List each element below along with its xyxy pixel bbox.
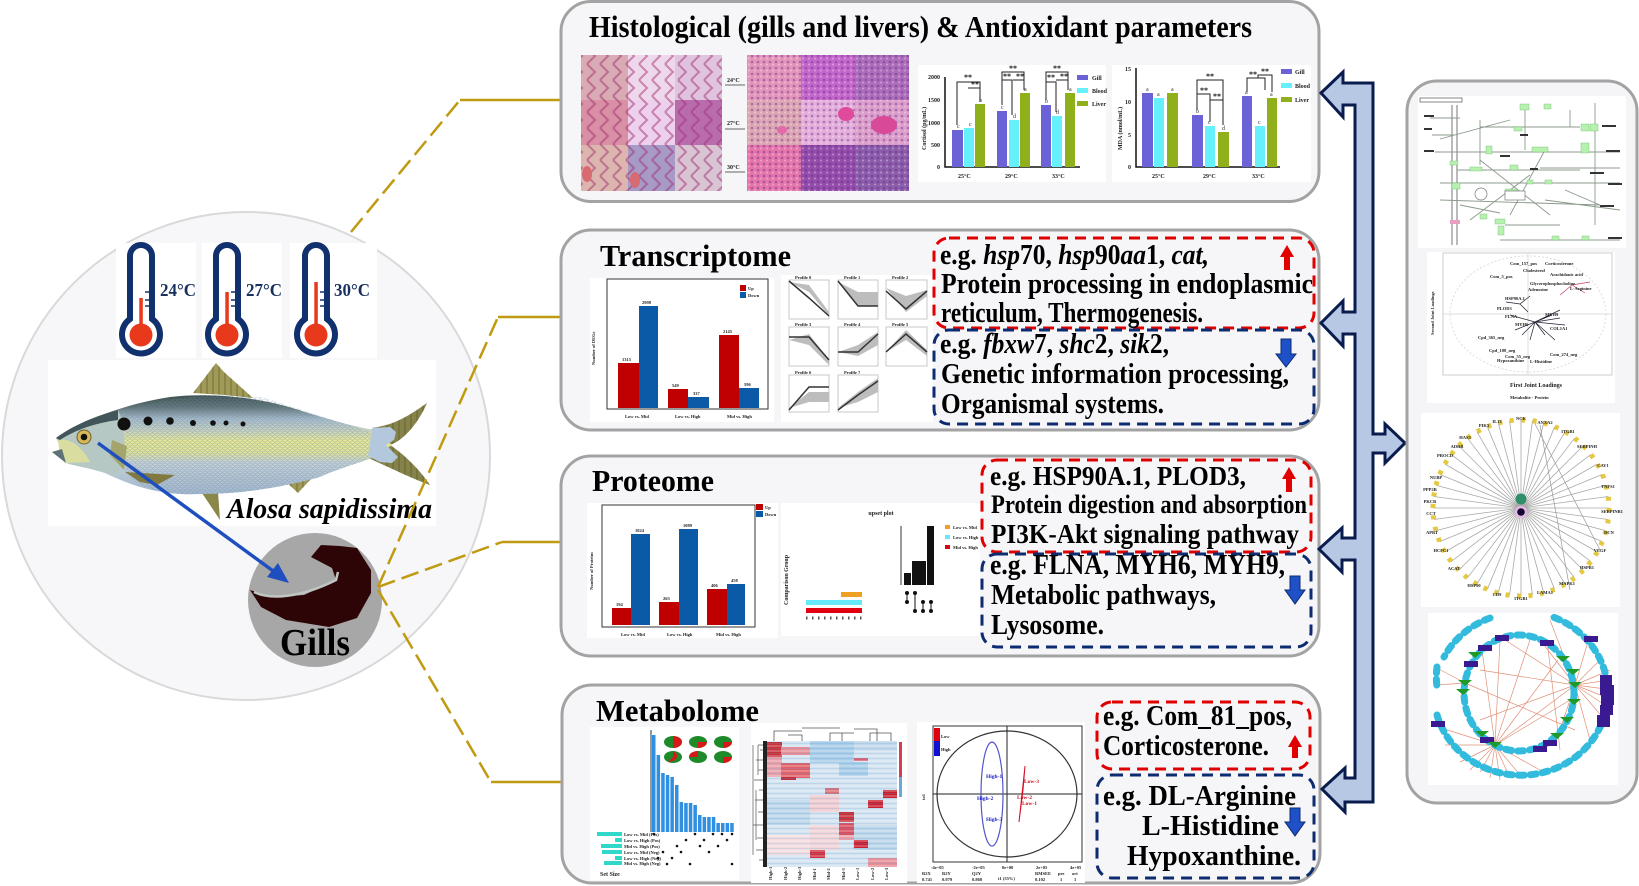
panel box xyxy=(561,2,1319,202)
upregulated callout: PI3K-Akt signaling pathway xyxy=(991,519,1299,549)
loadings plot: Metabolite · Protein xyxy=(1510,395,1549,400)
temperature labels between tiles xyxy=(725,77,745,172)
protein interaction network: HAS3 xyxy=(1459,435,1471,440)
protein interaction network: DCN xyxy=(1604,530,1615,535)
cortisol bar chart: ** xyxy=(1009,64,1017,73)
OPLS-DA score plot: R2Y xyxy=(942,871,951,876)
protein interaction network: ACAT xyxy=(1448,566,1460,571)
MDA bar chart: a xyxy=(1171,87,1174,93)
OPLS-DA score plot: RMSEE xyxy=(1035,871,1051,876)
MDA bar chart: 0 xyxy=(1128,165,1131,171)
DEG bar chart: 2145 xyxy=(723,329,733,334)
loadings plot: FLNA xyxy=(1505,314,1518,319)
cortisol bar chart: b xyxy=(1045,99,1048,105)
loadings plot: Cholesterol xyxy=(1523,268,1546,273)
protein interaction network: IL13 xyxy=(1492,419,1502,424)
cortisol bar chart: 1500 xyxy=(928,98,940,104)
liver histology tiles xyxy=(747,55,909,191)
cortisol bar chart: 29°C xyxy=(1005,173,1018,180)
upregulated callout: Corticosterone. xyxy=(1103,731,1269,762)
MDA bar chart: 15 xyxy=(1125,67,1131,73)
heatmap: Low-2 xyxy=(870,867,875,880)
panel box xyxy=(562,685,1320,883)
DEG bar chart: Number of DEGs xyxy=(591,331,596,365)
thermometers xyxy=(116,243,377,358)
up arrow xyxy=(1288,735,1302,758)
MDA bar chart: c xyxy=(1208,120,1211,126)
DEG bar chart: 1315 xyxy=(622,357,632,362)
cortisol bar chart: a xyxy=(1024,87,1027,93)
trend profile plots: Profile 6 xyxy=(795,370,812,375)
panel: integrated analysis xyxy=(1407,81,1637,803)
OPLS-DA score plot: 0e+00 xyxy=(1002,865,1014,870)
cortisol bar chart: ** xyxy=(964,73,972,82)
trend profile plots: Profile 0 xyxy=(795,275,812,280)
loadings plot: COL1A1 xyxy=(1550,326,1568,331)
DEP bar chart: 263 xyxy=(663,596,670,601)
cortisol bar chart: ** xyxy=(1060,72,1068,81)
cortisol bar chart: ** xyxy=(1016,72,1024,81)
upregulated callout xyxy=(1097,701,1310,769)
upregulated callout xyxy=(982,460,1311,552)
metabolite protein network xyxy=(1428,613,1618,785)
trend profile plots: Profile 1 xyxy=(844,275,861,280)
cortisol bar chart: ** xyxy=(1003,72,1011,81)
arrow: integration double arrows xyxy=(1319,72,1405,812)
cortisol bar chart: b xyxy=(979,98,982,104)
downregulated callout: e.g. DL-Arginine xyxy=(1103,781,1296,812)
MDA bar chart: 33°C xyxy=(1252,173,1265,180)
MDA bar chart: ** xyxy=(1206,72,1214,81)
OPLS-DA score plot: -4e+05 xyxy=(931,865,945,870)
OPLS-DA score plot: 4e+05 xyxy=(1070,865,1082,870)
DEP bar chart: Number of Proteins xyxy=(589,552,594,590)
DEP bar chart: Low vs. High xyxy=(667,632,693,637)
panel: fish and temperature circle xyxy=(2,212,490,700)
DEG bar chart: 549 xyxy=(672,383,680,388)
DEP bar chart: 194 xyxy=(616,602,624,607)
trend profile plots: Profile 4 xyxy=(844,322,861,327)
loadings plot: HSP90A.1 xyxy=(1505,296,1526,301)
OPLS-DA score plot xyxy=(917,722,1085,883)
MDA bar chart: a xyxy=(1157,92,1160,98)
heading: Proteome xyxy=(592,463,714,498)
protein interaction network: PKCR xyxy=(1424,499,1437,504)
cortisol bar chart: c xyxy=(969,122,972,128)
trend profile plots: Profile 5 xyxy=(892,322,909,327)
fish spots xyxy=(118,416,246,430)
MDA bar chart: Liver xyxy=(1295,98,1309,104)
trend profile plots: Profile 7 xyxy=(844,370,861,375)
protein interaction network: ADRB xyxy=(1451,444,1463,449)
protein interaction network: SERPINH xyxy=(1577,444,1597,449)
OPLS-DA score plot: 1 xyxy=(1074,877,1077,882)
DEP bar chart: Up xyxy=(765,505,771,510)
protein interaction network: VEGF xyxy=(1594,548,1606,553)
loadings plot: First Joint Loadings xyxy=(1510,383,1563,389)
OPLS-DA score plot: Q2Y xyxy=(972,871,982,876)
loadings plot: Cpd_188_neg xyxy=(1489,348,1516,353)
panel box xyxy=(1407,81,1637,803)
gills image xyxy=(248,533,382,667)
heading: Metabolome xyxy=(596,693,759,728)
protein interaction network xyxy=(1421,413,1624,607)
down arrow xyxy=(1276,339,1296,367)
cortisol bar chart: d xyxy=(1013,114,1016,120)
DEP bar chart: Mid vs. High xyxy=(716,632,741,637)
panel: metabolome xyxy=(562,685,1320,883)
cortisol bar chart: Liver xyxy=(1092,102,1106,108)
metabolite upset plot: Set Size xyxy=(600,872,620,878)
protein interaction network: ITGB1 xyxy=(1514,596,1528,601)
connector: metabolome xyxy=(378,590,562,782)
cortisol bar chart: c xyxy=(957,124,960,130)
metabolite upset plot xyxy=(590,727,739,880)
protein interaction network: SERPINB1 xyxy=(1601,509,1624,514)
MDA bar chart: MDA (nmol/mL) xyxy=(1117,107,1124,150)
protein interaction network: PPP2R xyxy=(1423,487,1438,492)
upset plot: Mid vs. High xyxy=(953,545,978,550)
MDA bar chart: a xyxy=(1146,87,1149,93)
cortisol bar chart: Cortisol (pg/mL) xyxy=(921,107,928,150)
panel: transcriptome xyxy=(561,230,1319,430)
MDA bar chart: b xyxy=(1196,109,1199,115)
downregulated callout: e.g. FLNA, MYH6, MYH9, xyxy=(990,550,1285,581)
upset plot: upset plot xyxy=(868,511,894,517)
cortisol bar chart: ** xyxy=(1053,64,1061,73)
temperature labels between tiles: 30°C xyxy=(727,164,740,171)
OPLS-DA score plot: ort xyxy=(1072,871,1078,876)
MDA bar chart: Blood xyxy=(1295,84,1311,90)
loadings plot: Glycerophosphocholine xyxy=(1530,281,1575,286)
upregulated callout: reticulum, Thermogenesis. xyxy=(941,298,1203,329)
species name: Alosa sapidissima xyxy=(225,494,432,525)
metabolite upset plot: Low vs. Mid (Neg) xyxy=(624,850,660,855)
heatmap: Mid-1 xyxy=(812,868,817,880)
thermometer 30C xyxy=(297,245,370,353)
OPLS-DA score plot: pre xyxy=(1058,871,1064,876)
downregulated callout: Organismal systems. xyxy=(941,389,1164,420)
up arrow xyxy=(1282,467,1296,492)
upregulated callout: Protein processing in endoplasmic xyxy=(941,269,1313,300)
DEP bar chart: Down xyxy=(765,512,777,517)
trend profile plots: Profile 3 xyxy=(795,322,812,327)
DEG bar chart: Down xyxy=(748,293,760,298)
upregulated callout xyxy=(934,238,1314,329)
MDA bar chart: 29°C xyxy=(1203,173,1216,180)
KEGG pathway map xyxy=(1418,96,1626,248)
loadings plot: MYH9 xyxy=(1545,312,1559,317)
OPLS-DA score plot: High-3 xyxy=(986,817,1002,823)
protein interaction network: HCFC1 xyxy=(1434,548,1449,553)
MDA bar chart: 10 xyxy=(1125,100,1131,106)
OPLS-DA score plot: 0.102 xyxy=(1035,877,1046,882)
downregulated callout: Hypoxanthine. xyxy=(1127,841,1301,872)
OPLS-DA score plot: to1 xyxy=(921,793,926,800)
OPLS-DA score plot: -2e+05 xyxy=(972,865,986,870)
OPLS-DA score plot: High xyxy=(941,747,951,752)
heatmap: Low-1 xyxy=(855,867,860,880)
MDA bar chart: Gill xyxy=(1295,70,1305,76)
cortisol bar chart: d xyxy=(1056,110,1059,116)
metabolite upset plot: Low vs. Mid (Pos) xyxy=(624,832,659,837)
heatmap: Mid-3 xyxy=(841,868,846,880)
OPLS-DA score plot: Low-1 xyxy=(1022,801,1037,807)
DEP bar chart xyxy=(587,503,778,638)
loadings plot: Com_157_pos xyxy=(1510,261,1537,266)
down arrow xyxy=(1285,576,1305,604)
cortisol bar chart: 2000 xyxy=(928,75,940,81)
OPLS-DA score plot: Low-3 xyxy=(1024,779,1039,785)
metabolite upset plot: Mid vs. High (Neg) xyxy=(624,861,661,866)
DEG bar chart: Low vs. Mid xyxy=(625,414,649,419)
downregulated callout: Lysosome. xyxy=(991,610,1104,641)
temperature labels between tiles: 24°C xyxy=(727,77,740,84)
protein interaction network: HSPB1 xyxy=(1580,565,1595,570)
DEP bar chart: 406 xyxy=(711,583,718,588)
MDA bar chart: 25°C xyxy=(1152,173,1165,180)
OPLS-DA score plot: High-1 xyxy=(986,774,1002,780)
down arrow xyxy=(1285,808,1305,836)
cortisol bar chart xyxy=(918,64,1108,182)
OPLS-DA score plot: 1 xyxy=(1060,877,1063,882)
cortisol bar chart: 500 xyxy=(931,143,940,149)
DEP bar chart: 1089 xyxy=(683,523,693,528)
panel box xyxy=(561,456,1319,656)
DEP bar chart: 458 xyxy=(731,578,738,583)
upset plot xyxy=(781,503,980,636)
cortisol bar chart: 1000 xyxy=(928,121,940,127)
cortisol bar chart: 25°C xyxy=(958,173,971,180)
OPLS-DA score plot: Low xyxy=(941,734,950,739)
heatmap: High-3 xyxy=(797,866,802,880)
MDA bar chart: d xyxy=(1222,126,1225,132)
connector: histology xyxy=(351,100,561,232)
cortisol bar chart: ** xyxy=(971,80,979,89)
heatmap: Mid-2 xyxy=(826,868,831,880)
protein interaction network: NCK xyxy=(1516,416,1526,421)
fish eye xyxy=(77,430,91,444)
heatmap: High-1 xyxy=(768,866,773,880)
protein interaction network: MAPK1 xyxy=(1559,581,1576,586)
OPLS-DA score plot: Low-2 xyxy=(1017,795,1032,801)
loadings plot: MYH6 xyxy=(1515,322,1529,327)
DEG bar chart: Low vs. High xyxy=(675,414,701,419)
connector: proteome xyxy=(378,542,561,587)
metabolite upset plot: Low vs. High (Neg) xyxy=(624,856,662,861)
cortisol bar chart: 33°C xyxy=(1052,173,1065,180)
cortisol bar chart: Gill xyxy=(1092,76,1102,82)
MDA bar chart: 5 xyxy=(1128,133,1131,139)
panel: proteome xyxy=(561,456,1319,656)
downregulated callout: Genetic information processing, xyxy=(941,359,1289,390)
loadings plot: Hypoxanthine xyxy=(1497,358,1524,363)
DEG bar chart: 2998 xyxy=(642,300,652,305)
thermometer 27C xyxy=(208,245,282,353)
loadings plot: Corticosterone xyxy=(1545,261,1573,266)
heatmap: High-2 xyxy=(783,866,788,880)
panel box xyxy=(561,230,1319,430)
DEG bar chart: Up xyxy=(748,286,754,291)
loadings plot: Com_55_neg xyxy=(1505,354,1531,359)
panel: histological and antioxidant xyxy=(561,2,1319,202)
cortisol bar chart: c xyxy=(1001,105,1004,111)
protein interaction network: CD9 xyxy=(1493,592,1502,597)
thermometer 24C: 24°C xyxy=(160,280,196,300)
gills image: Gills xyxy=(280,622,350,664)
protein interaction network: CAV1 xyxy=(1597,463,1609,468)
upset plot: Comparison Group xyxy=(784,554,790,605)
MDA bar chart: ** xyxy=(1249,70,1257,79)
loadings plot: Com_274_neg xyxy=(1550,352,1578,357)
OPLS-DA score plot: High-2 xyxy=(977,796,993,802)
DEG bar chart: 596 xyxy=(744,382,752,387)
loadings plot: Adenosine xyxy=(1528,287,1548,292)
MDA bar chart: ** xyxy=(1200,86,1208,95)
protein interaction network: PROCD xyxy=(1437,453,1454,458)
downregulated callout: e.g. fbxw7, shc2, sik2, xyxy=(940,329,1169,360)
cortisol bar chart: ** xyxy=(1047,73,1055,82)
loadings plot: PLOD3 xyxy=(1497,306,1513,311)
loadings plot: Second Joint Loadings xyxy=(1430,291,1435,335)
trend profile plots xyxy=(781,275,933,422)
protein interaction network: LAMA1 xyxy=(1537,590,1554,595)
upregulated callout: e.g. hsp70, hsp90aa1, cat, xyxy=(940,240,1209,271)
OPLS-DA score plot: R2X xyxy=(922,871,931,876)
fish illustration xyxy=(48,360,436,526)
DEP bar chart: 1024 xyxy=(635,528,645,533)
gill histology tiles xyxy=(581,55,722,191)
downregulated callout: L-Histidine xyxy=(1142,811,1279,842)
up arrow xyxy=(1280,245,1294,270)
cortisol bar chart: 0 xyxy=(937,165,940,171)
protein interaction network: TNFS1 xyxy=(1601,484,1616,489)
MDA bar chart: a xyxy=(1270,92,1273,98)
downregulated callout xyxy=(982,550,1311,647)
loadings plot: L-Histidine xyxy=(1530,359,1552,364)
protein interaction network: APRT xyxy=(1426,530,1438,535)
upset plot: Low vs. High xyxy=(953,535,979,540)
loadings plot: Arachidonic acid xyxy=(1550,272,1583,277)
heading: Transcriptome xyxy=(600,238,791,273)
upset plot: Low vs. Mid xyxy=(953,525,977,530)
cortisol bar chart: Blood xyxy=(1092,89,1108,95)
thermometer 24C xyxy=(122,245,196,353)
loadings plot: Cpd_365_neg xyxy=(1478,335,1505,340)
OPLS-DA score plot: t1 (55%) xyxy=(998,876,1015,881)
trend profile plots: Profile 2 xyxy=(892,275,909,280)
protein interaction network: NUBP xyxy=(1430,475,1442,480)
heatmap: Low-3 xyxy=(884,867,889,880)
loadings plot: L-Arginine xyxy=(1570,286,1592,291)
thermometer 27C: 27°C xyxy=(246,280,282,300)
loadings plot xyxy=(1427,252,1615,403)
MDA bar chart: ** xyxy=(1213,92,1221,101)
MDA bar chart xyxy=(1112,65,1311,182)
heading: Histological (gills and livers) & Antioxidant parameters xyxy=(589,9,1252,44)
heatmap xyxy=(751,723,907,883)
connector: transcriptome xyxy=(378,317,560,587)
upregulated callout: Protein digestion and absorption xyxy=(991,490,1307,519)
downregulated callout xyxy=(1097,775,1314,878)
upregulated callout: e.g. HSP90A.1, PLOD3, xyxy=(990,461,1246,491)
MDA bar chart: ** xyxy=(1261,67,1269,76)
protein interaction network: ITGB1 xyxy=(1561,429,1575,434)
cortisol bar chart: a xyxy=(1069,87,1072,93)
arrow: fish to gills xyxy=(98,443,289,583)
metabolite upset plot: Mid vs. High (Pos) xyxy=(624,844,660,849)
OPLS-DA score plot: 2e+05 xyxy=(1036,865,1048,870)
MDA bar chart: c xyxy=(1258,120,1261,126)
downregulated callout: Metabolic pathways, xyxy=(991,580,1216,611)
upregulated callout: e.g. Com_81_pos, xyxy=(1103,701,1292,732)
temperature labels between tiles: 27°C xyxy=(727,120,740,127)
protein interaction network: PIK3 xyxy=(1479,423,1490,428)
downregulated callout xyxy=(934,329,1314,424)
MDA bar chart: a xyxy=(1245,90,1248,96)
protein interaction network: HSP90 xyxy=(1467,583,1481,588)
metabolite upset plot: Low vs. High (Pos) xyxy=(624,838,661,843)
big circle xyxy=(2,212,490,700)
OPLS-DA score plot: 0.868 xyxy=(972,877,983,882)
DEG bar chart: Mid vs. High xyxy=(727,414,752,419)
thermometer 30C: 30°C xyxy=(334,280,370,300)
DEG bar chart xyxy=(590,278,774,422)
loadings plot: Com_5_pos xyxy=(1490,274,1513,279)
OPLS-DA score plot: 0.979 xyxy=(942,877,953,882)
OPLS-DA score plot: 0.741 xyxy=(922,877,933,882)
DEP bar chart: Low vs. Mid xyxy=(621,632,645,637)
protein interaction network: ANXA2 xyxy=(1537,420,1553,425)
DEG bar chart: 337 xyxy=(693,391,700,396)
protein interaction network: CCT xyxy=(1426,511,1436,516)
